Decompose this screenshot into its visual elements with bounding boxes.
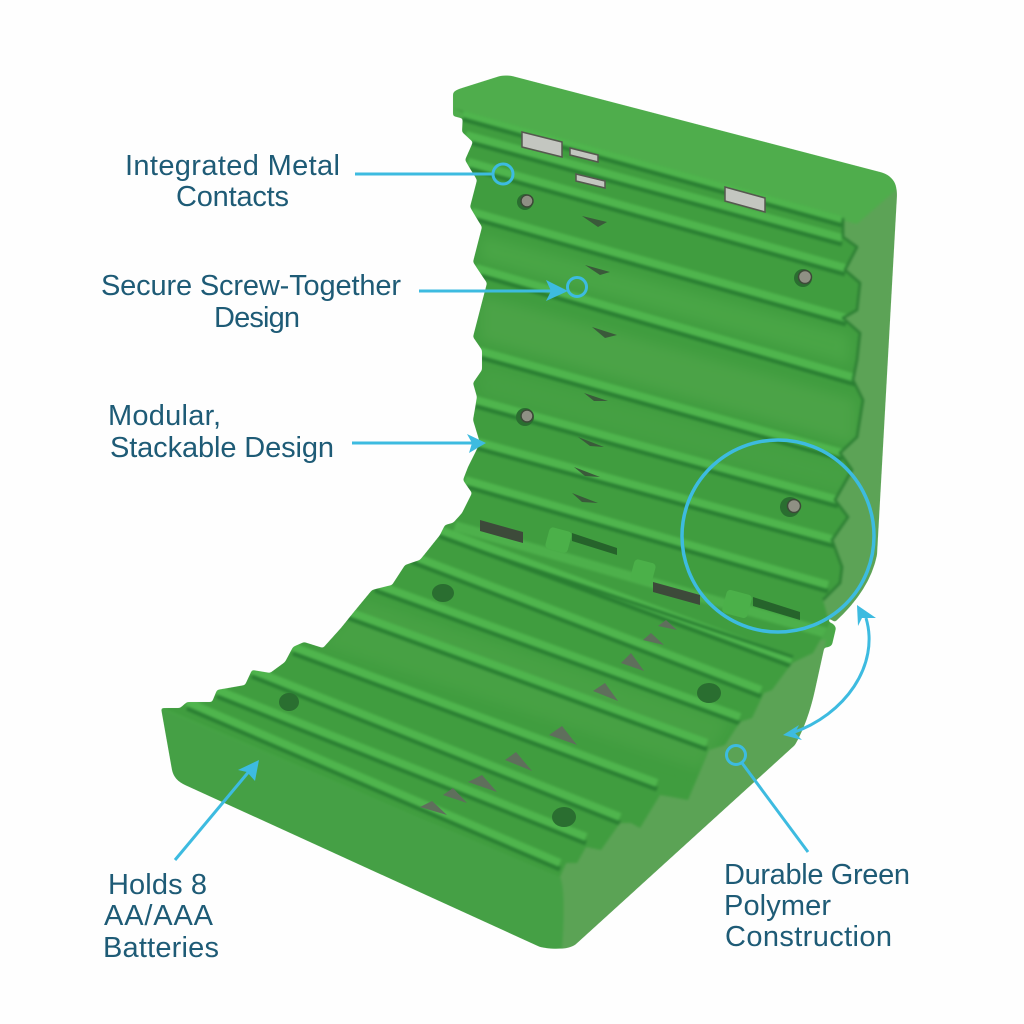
callout: Durable Green Polymer Construction: Durable Green <box>724 859 910 891</box>
callout: Integrated Metal Contacts: Contacts <box>176 181 289 213</box>
callout: Holds 8 AA/AAA Batteries: Batteries <box>103 932 219 964</box>
callout: Secure Screw-Together Design: Design <box>214 302 300 334</box>
callout: Holds 8 AA/AAA Batteries <box>103 760 259 964</box>
callout: Integrated Metal Contacts <box>125 150 513 213</box>
upper shell: top rim <box>453 76 896 224</box>
callout: Secure Screw-Together Design <box>101 270 586 334</box>
callout: Durable Green Polymer Construction: Polymer <box>724 890 831 922</box>
hinge seam <box>823 218 863 600</box>
lower shell: top surface with ribs <box>161 520 830 880</box>
callout: Modular, Stackable Design <box>108 400 486 464</box>
callout: magnifier circle on screw <box>682 440 874 632</box>
callout: Modular, Stackable Design: Modular, <box>108 400 221 432</box>
hinge strip contacts, slots and cylinders <box>480 520 800 620</box>
upper screws <box>516 194 812 517</box>
upper shell: side wall <box>815 172 897 622</box>
product: open green battery case <box>161 76 897 949</box>
callout: Secure Screw-Together Design: Secure Screw-Together <box>101 270 401 302</box>
callout: Integrated Metal Contacts: Integrated Metal <box>125 150 340 182</box>
callout: Holds 8 AA/AAA Batteries: AA/AAA <box>104 900 214 932</box>
arrow: curved opening arrow <box>783 605 876 740</box>
callout: Modular, Stackable Design: Stackable Design <box>110 432 334 464</box>
callout: Holds 8 AA/AAA Batteries: Holds 8 <box>108 869 207 901</box>
upper metal contacts and marks <box>522 132 765 503</box>
lower holes and spikes <box>279 584 721 827</box>
callout: Durable Green Polymer Construction: Construction <box>725 921 892 953</box>
product shell shapes <box>161 76 897 949</box>
lower shell: front face <box>161 708 564 949</box>
callout: Durable Green Polymer Construction <box>724 746 910 953</box>
upper shell: inner face with ribs <box>453 108 863 625</box>
lower shell: hinge knuckle <box>815 622 836 648</box>
lower shell: right side wall <box>555 640 826 949</box>
